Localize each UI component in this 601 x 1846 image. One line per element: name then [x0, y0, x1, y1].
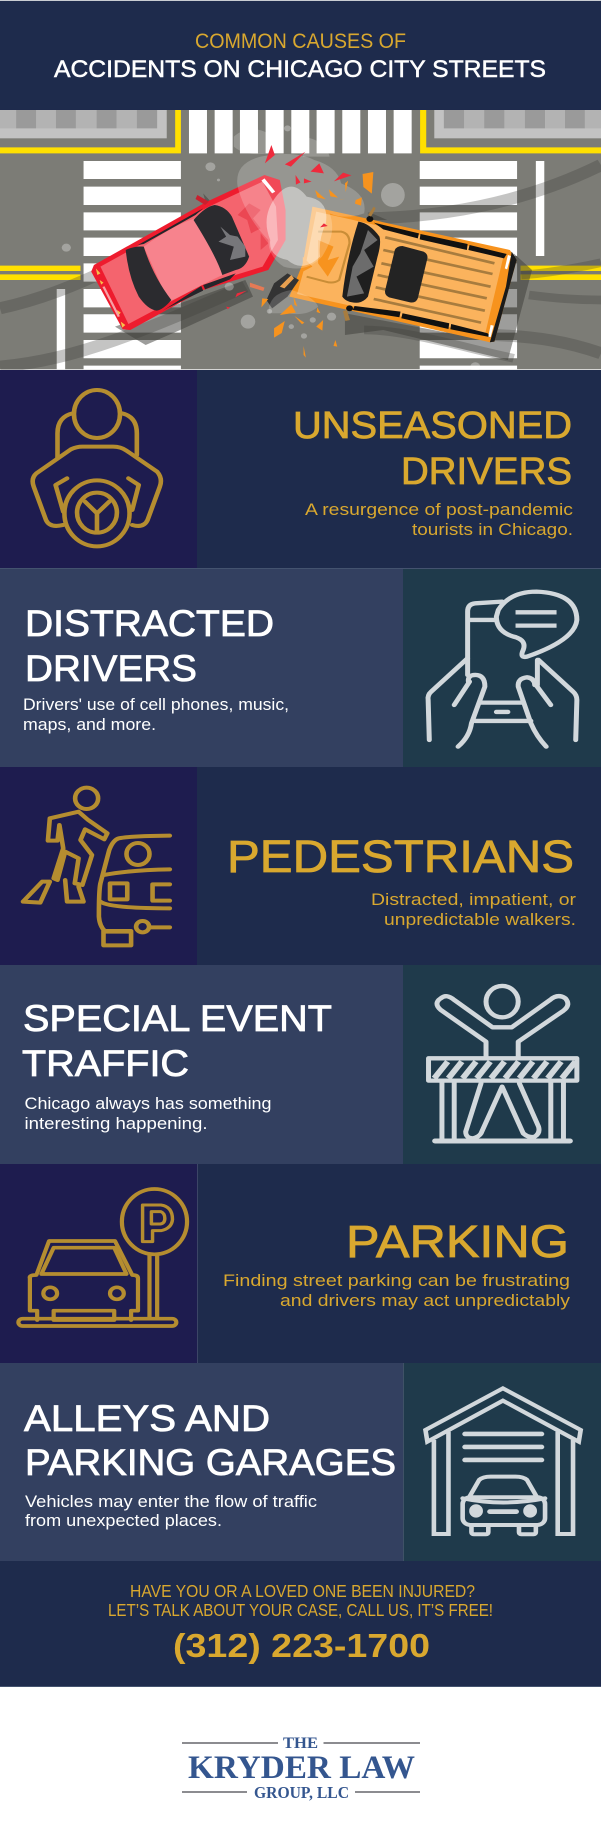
heading: alleys and parking garages: ALLEYS AND: [24, 1398, 270, 1439]
heading: alleys and parking garages: [24, 1398, 396, 1483]
text: phone number: (312) 223-1700: [173, 1627, 430, 1664]
text: distracted description: Drivers' use of cell phones, music,: [23, 696, 289, 714]
heading: special event traffic: [22, 998, 332, 1084]
heading: distracted drivers: [25, 603, 274, 689]
panel: unseasoned drivers: [0, 370, 601, 569]
title: ACCIDENTS ON CHICAGO CITY STREETS: [54, 56, 546, 83]
text: parking description: Finding street parking can be frustrating: [223, 1272, 570, 1290]
icon: parked car and parking sign: [18, 1189, 187, 1326]
heading: common causes of: COMMON CAUSES OF: [195, 30, 406, 53]
text: alleys description: [25, 1493, 317, 1530]
text: unseasoned description: A resurgence of post-pandemic: [305, 501, 573, 519]
text: parking description: [223, 1272, 571, 1310]
panel: header: [0, 0, 601, 111]
text: distracted description: [23, 696, 289, 734]
heading: distracted drivers: DRIVERS: [25, 648, 197, 689]
panel: alleys and parking garages: [0, 1363, 601, 1561]
text: pedestrians description: unpredictable walkers.: [384, 911, 576, 929]
heading: special event traffic: SPECIAL EVENT: [23, 998, 332, 1039]
text: special event description: Chicago always has something: [24, 1095, 272, 1113]
heading: pedestrians: PEDESTRIANS: [227, 831, 574, 882]
text: pedestrians description: [371, 891, 577, 929]
panel: call to action: [0, 1561, 601, 1687]
car: orange SUV: [266, 207, 517, 342]
panel: distracted drivers: [0, 568, 601, 767]
icon: pedestrian and car: [23, 788, 170, 945]
heading: unseasoned drivers: UNSEASONED: [293, 405, 572, 447]
logo: the kryder law group: THE: [283, 1735, 318, 1752]
panel: parking: [0, 1164, 601, 1363]
logo: the kryder law group: KRYDER LAW: [188, 1750, 415, 1786]
text: alleys description: from unexpected places.: [25, 1512, 222, 1530]
text: special event description: [24, 1095, 272, 1133]
text: unseasoned description: tourists in Chicago.: [412, 521, 573, 539]
text: unseasoned description: [305, 501, 573, 539]
logo: the kryder law group: [182, 1735, 420, 1802]
heading: special event traffic: TRAFFIC: [22, 1043, 189, 1084]
icon: person behind barrier: [429, 986, 577, 1141]
text: call to action: LET’S TALK ABOUT YOUR CASE, CALL US, IT’S FREE!: [108, 1600, 493, 1620]
text: pedestrians description: Distracted, impatient, or: [371, 891, 577, 909]
text: parking description: and drivers may act unpredictably: [280, 1292, 571, 1310]
panel: special event traffic: [0, 965, 601, 1164]
text: call to action: [108, 1581, 493, 1620]
icon: garage with car: [425, 1388, 581, 1534]
illustration: car crash at intersection: [0, 110, 601, 371]
text: alleys description: Vehicles may enter the flow of traffic: [25, 1493, 317, 1511]
heading: unseasoned drivers: [293, 405, 572, 493]
car: red sedan: [91, 175, 286, 330]
icon: driver at steering wheel: [33, 390, 161, 546]
heading: unseasoned drivers: DRIVERS: [401, 451, 572, 493]
text: special event description: interesting happening.: [24, 1115, 208, 1133]
panel: pedestrians: [0, 767, 601, 965]
icon: hands holding phone: [428, 592, 577, 747]
text: distracted description: maps, and more.: [23, 716, 156, 734]
text: call to action: HAVE YOU OR A LOVED ONE BEEN INJURED?: [130, 1581, 475, 1601]
logo: the kryder law group: GROUP, LLC: [254, 1783, 349, 1802]
smoke and debris: [62, 125, 480, 371]
heading: alleys and parking garages: PARKING GARAGES: [25, 1442, 396, 1483]
heading: distracted drivers: DISTRACTED: [25, 603, 274, 644]
heading: parking: PARKING: [346, 1216, 569, 1267]
